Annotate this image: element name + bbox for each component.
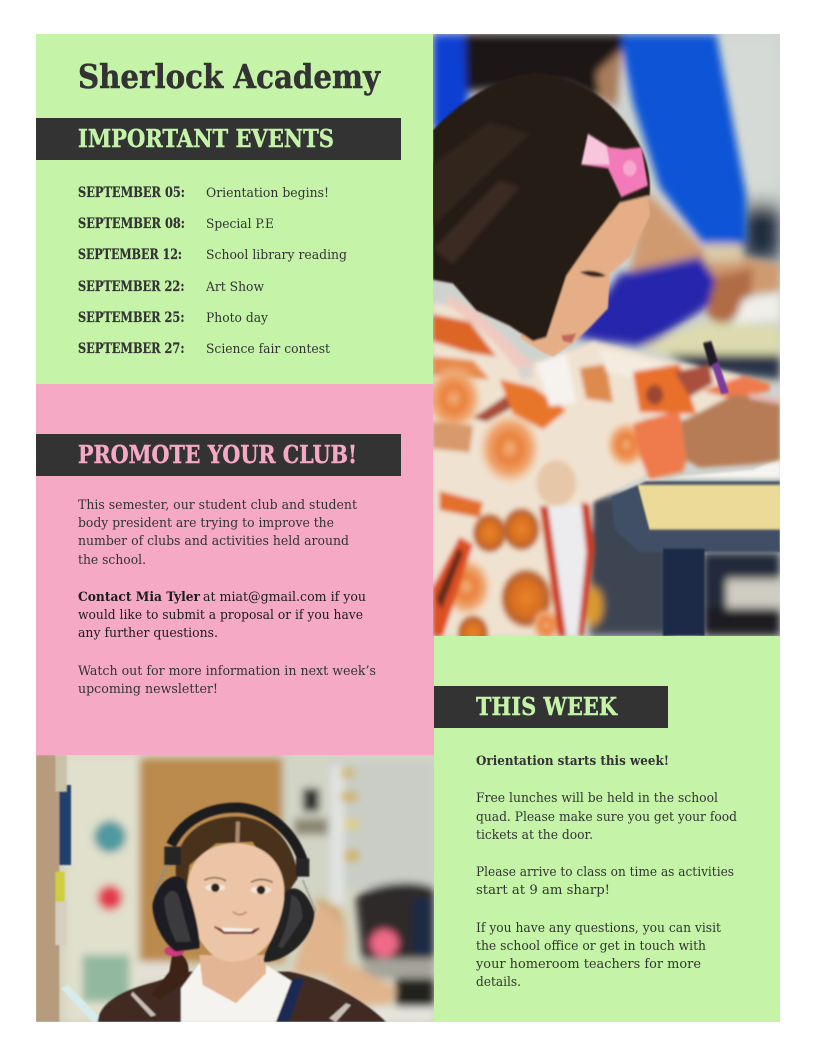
text block: orientation note: Orientation starts this week! [476,754,669,769]
panel: promote your club [36,384,434,755]
text block: contact: any further questions. [78,626,218,641]
text block: questions: your homeroom teachers for more [475,957,701,972]
text block: next week: Watch out for more information in next week’s [78,664,376,679]
event list: Orientation begins! [206,186,329,201]
sweater [98,972,386,1022]
hand [681,395,780,468]
event list: SEPTEMBER 08: [78,216,185,232]
photo: girl writing at desk [424,34,780,652]
text block: questions [475,921,722,990]
cuff [703,376,770,399]
text block: club intro: body president are trying to improve the [78,516,334,531]
photo: girl with headphones [36,755,434,1022]
pen [705,341,729,394]
text block: arrival: start at 9 am sharp! [476,883,610,898]
text block: questions: the school office or get in touch with [476,939,707,954]
text block: contact [78,590,366,641]
text block: club intro: This semester, our student club and student [78,498,358,513]
text block: arrival: Please arrive to class on time as activities [476,865,734,880]
event list: Art Show [205,280,264,295]
event list [78,185,347,357]
event list: SEPTEMBER 25: [78,310,184,326]
pigtail [151,952,189,1000]
headband [171,808,304,865]
panel: important events [36,34,434,384]
event list: SEPTEMBER 05: [78,185,185,201]
text block: lunches: tickets at the door. [476,828,593,843]
jacket [433,303,770,636]
near desk [611,481,780,552]
text block: next week: upcoming newsletter! [78,682,218,697]
text block: lunches [476,791,737,843]
heading: important events: IMPORTANT EVENTS [78,124,334,153]
text block: arrival [476,865,734,898]
panel: this week [434,636,780,1022]
event list: Special P.E [206,217,274,232]
text block: next week [78,664,376,697]
heading: this week: THIS WEEK [476,692,618,721]
title: Sherlock Academy [78,57,381,96]
heading: promote your club: PROMOTE YOUR CLUB! [78,440,357,469]
text block: lunches: quad. Please make sure you get your food [476,810,737,825]
neck [199,955,266,1003]
text block: club intro: the school. [78,553,146,568]
event list: SEPTEMBER 27: [78,341,184,357]
shirt [181,963,293,1022]
event list: SEPTEMBER 12: [78,247,182,263]
text block: club intro [78,498,358,568]
face [520,191,650,356]
face [188,843,284,962]
heading: this week [434,686,668,728]
ear cups [152,876,200,952]
heading: promote your club [36,434,401,476]
text block: contact: Contact Mia Tyler [78,590,200,605]
text block: questions: If you have any questions, you can visit [476,921,722,936]
bow [581,134,648,197]
text block: club intro: number of clubs and activities held around [78,534,349,549]
event list: SEPTEMBER 22: [78,279,184,295]
text block: contact: would like to submit a proposal or if you have [78,608,363,623]
event list: Science fair contest [206,342,331,357]
text block: contact: at miat@gmail.com if you [203,590,366,605]
heading: important events [36,118,401,160]
collar [445,295,532,368]
hair [176,817,298,898]
text block: lunches: Free lunches will be held in the school [476,791,718,806]
event list: School library reading [206,248,347,263]
text block: questions: details. [476,975,521,990]
hair [433,72,650,341]
event list: Photo day [206,311,269,326]
